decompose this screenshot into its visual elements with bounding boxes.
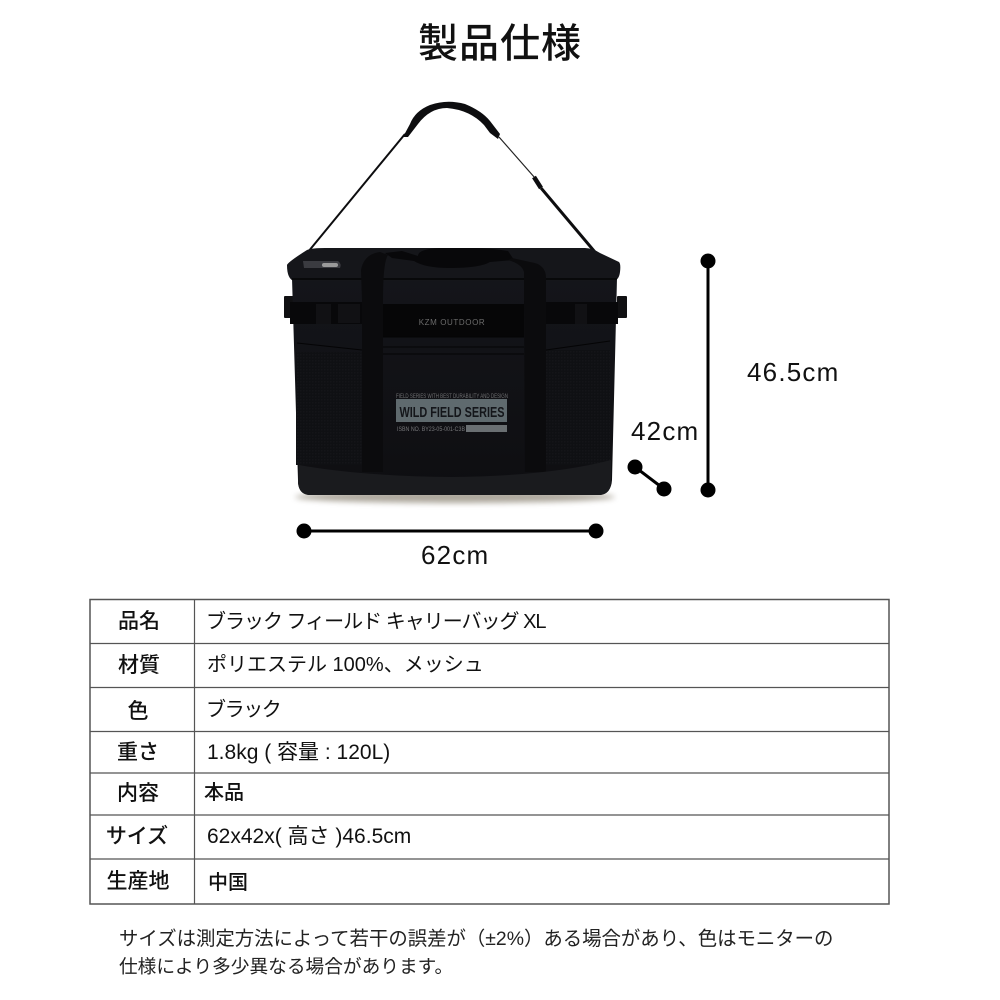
footnote: サイズは測定方法によって若干の誤差が（±2%）ある場合があり、色はモニターの bbox=[119, 928, 833, 950]
height label: 46.5cm bbox=[747, 357, 839, 387]
spec table: ブラック bbox=[206, 699, 280, 721]
spec table bbox=[89, 598, 890, 905]
depth label: 42cm bbox=[631, 416, 699, 446]
bag lid bbox=[287, 248, 620, 281]
molle webbing left bbox=[290, 302, 362, 324]
spec table: 本品 bbox=[204, 782, 244, 804]
velcro patch with logo bbox=[383, 304, 524, 337]
wild field series patch: WILD FIELD SERIES bbox=[400, 404, 504, 421]
spec table: ポリエステル 100%、メッシュ bbox=[207, 654, 484, 676]
front pocket seams bbox=[297, 337, 610, 354]
row: product name: 品名 bbox=[118, 610, 160, 633]
tote straps bbox=[361, 252, 546, 472]
footnote: 仕様により多少異なる場合があります。 bbox=[119, 956, 453, 977]
dimension: height bbox=[700, 254, 716, 498]
bag body bbox=[292, 278, 617, 495]
shoulder strap bbox=[308, 102, 600, 258]
width label: 62cm bbox=[421, 540, 489, 570]
footnote bbox=[119, 928, 833, 977]
mesh side pockets bbox=[296, 352, 362, 465]
lid brand tag bbox=[303, 261, 341, 268]
top carry handle bbox=[385, 248, 514, 268]
bag base bbox=[298, 460, 611, 495]
spec table: 1.8kg ( 容量 : 120L) bbox=[207, 741, 390, 764]
wild field series patch: FIELD SERIES WITH BEST DURABILITY AND DESIGN bbox=[396, 394, 508, 400]
dimension: width bbox=[296, 524, 604, 538]
molle webbing right bbox=[546, 302, 618, 324]
row: material: 材質 bbox=[118, 654, 160, 677]
row: size: サイズ bbox=[106, 825, 168, 848]
row: weight: 重さ bbox=[117, 741, 159, 764]
spec table: 中国 bbox=[208, 872, 248, 894]
velcro patch with logo: KZM OUTDOOR bbox=[419, 318, 485, 327]
product image: black carry bag bbox=[284, 102, 716, 538]
wild field series patch: ISBN NO. BY23-05-001-C3B bbox=[397, 427, 465, 433]
bag shadow bbox=[295, 491, 615, 503]
spec table: ブラック フィールド キャリーバッグ XL bbox=[206, 611, 546, 633]
row: colour: 色 bbox=[128, 700, 148, 723]
row: origin: 生産地 bbox=[106, 870, 170, 893]
side webbing loops bbox=[284, 296, 294, 318]
wild field series patch bbox=[396, 394, 508, 433]
spec table: 62x42x( 高さ )46.5cm bbox=[207, 825, 411, 848]
row: contents: 内容 bbox=[117, 782, 159, 805]
dimension: depth bbox=[628, 460, 672, 496]
title: 製品仕様 bbox=[418, 22, 582, 66]
